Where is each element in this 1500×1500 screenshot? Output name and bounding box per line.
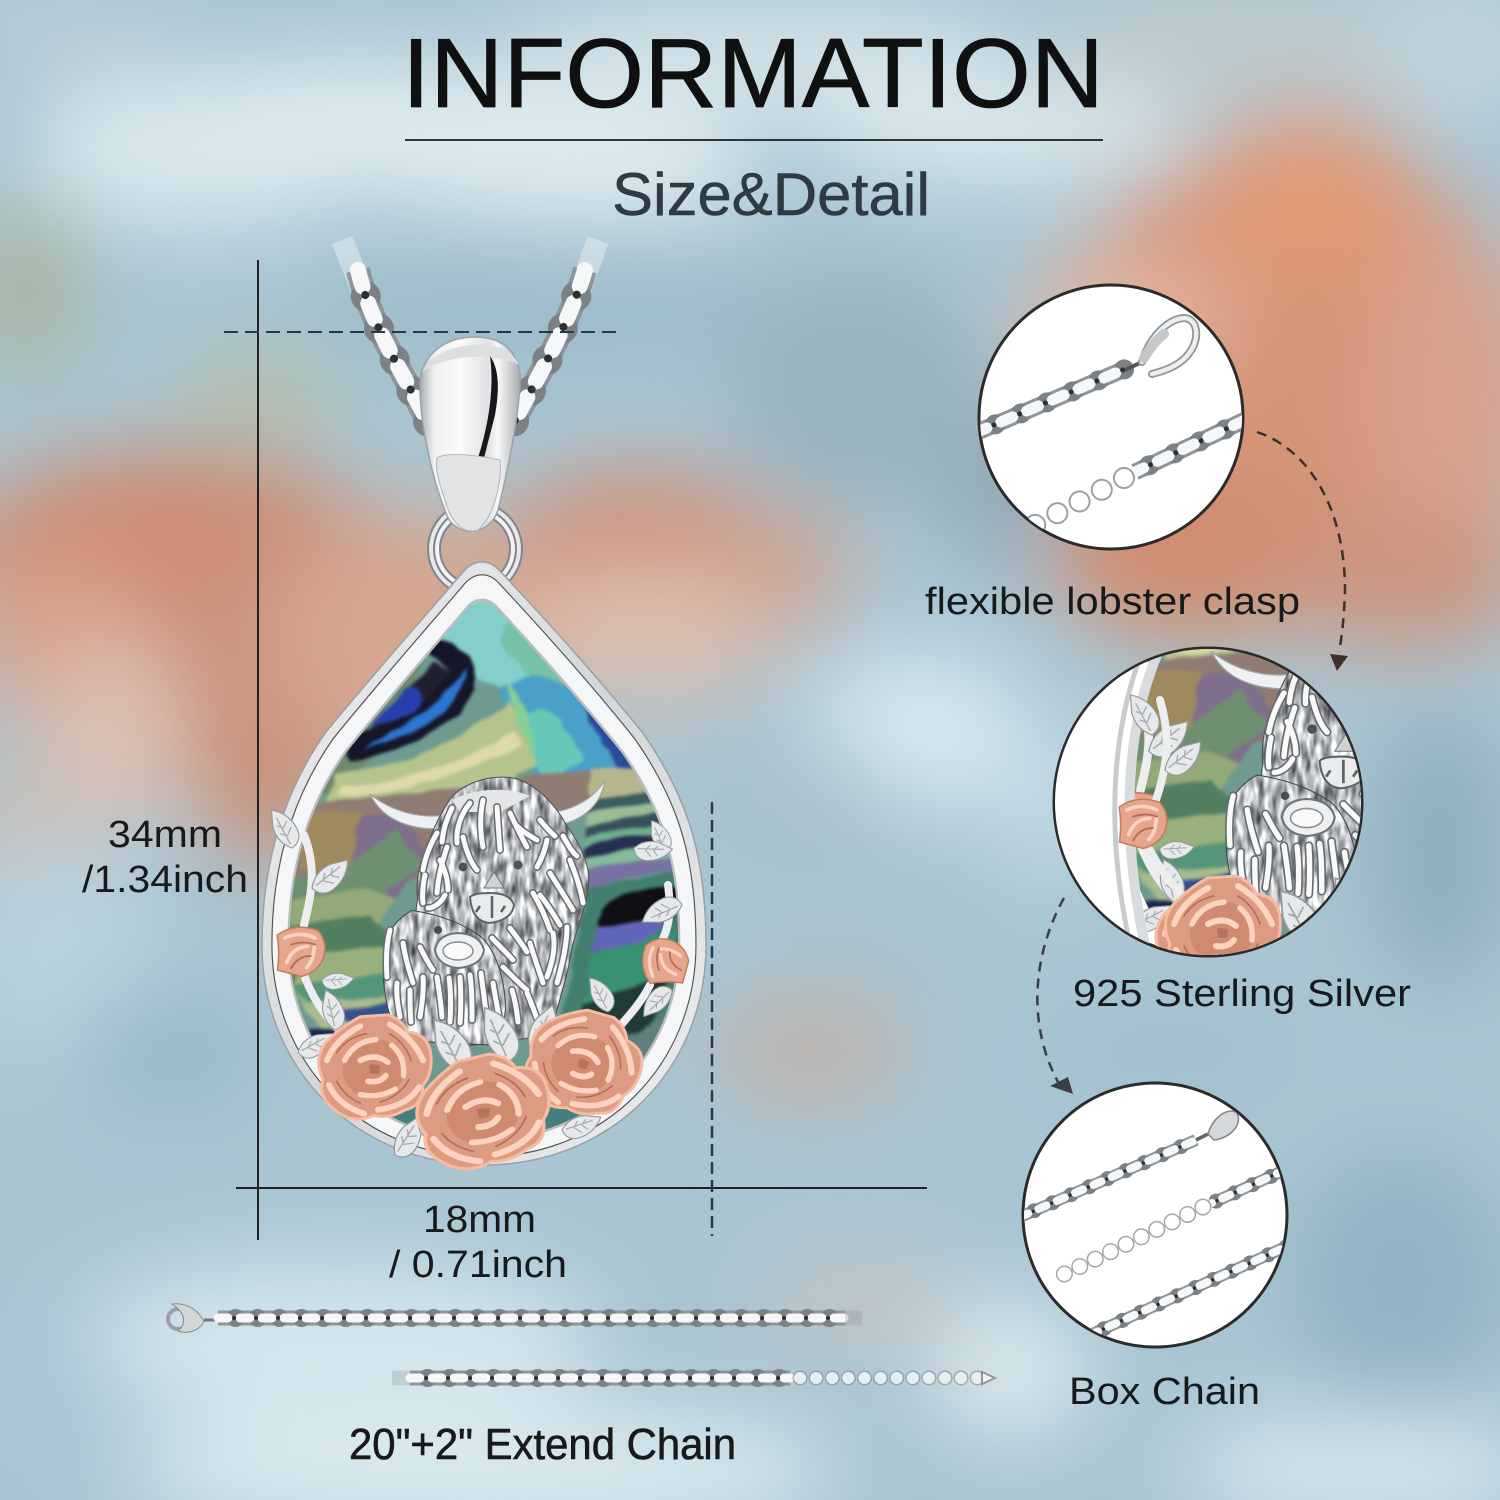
34mm label: /1.34inch	[82, 859, 248, 901]
18mm label: 18mm	[423, 1199, 536, 1241]
detail circle: lobster clasp	[975, 285, 1245, 549]
label: flexible lobster clasp: flexible lobster clasp	[925, 581, 1300, 623]
detail circle: 925 sterling silver	[1052, 646, 1364, 958]
34mm label: 34mm	[108, 814, 222, 856]
width measurement lines	[236, 802, 927, 1236]
arrow: clasp to silver	[1257, 432, 1348, 671]
pendant ring	[431, 505, 519, 593]
pendant frame	[262, 562, 706, 1165]
pendant abalone, cow and roses	[260, 560, 710, 1176]
title: INFORMATION	[402, 18, 1104, 128]
label: extend chain: 20"+2" Extend Chain	[349, 1420, 736, 1469]
label: 925 sterling silver: 925 Sterling Silver	[1073, 973, 1411, 1015]
subtitle: Size&Detail	[612, 161, 930, 228]
full chain, clasp end	[168, 1304, 862, 1332]
18mm label	[389, 1199, 567, 1286]
title underline	[405, 139, 1103, 141]
arrow: silver to box chain	[1037, 898, 1073, 1094]
pendant chain	[342, 240, 598, 425]
pendant bail	[420, 337, 520, 531]
34mm label	[82, 814, 248, 901]
detail circle: box chain	[1020, 1083, 1290, 1347]
label: box chain: Box Chain	[1069, 1371, 1260, 1413]
18mm label: / 0.71inch	[389, 1244, 567, 1286]
height measurement lines	[224, 260, 618, 1240]
full chain, extender end	[392, 1372, 995, 1384]
